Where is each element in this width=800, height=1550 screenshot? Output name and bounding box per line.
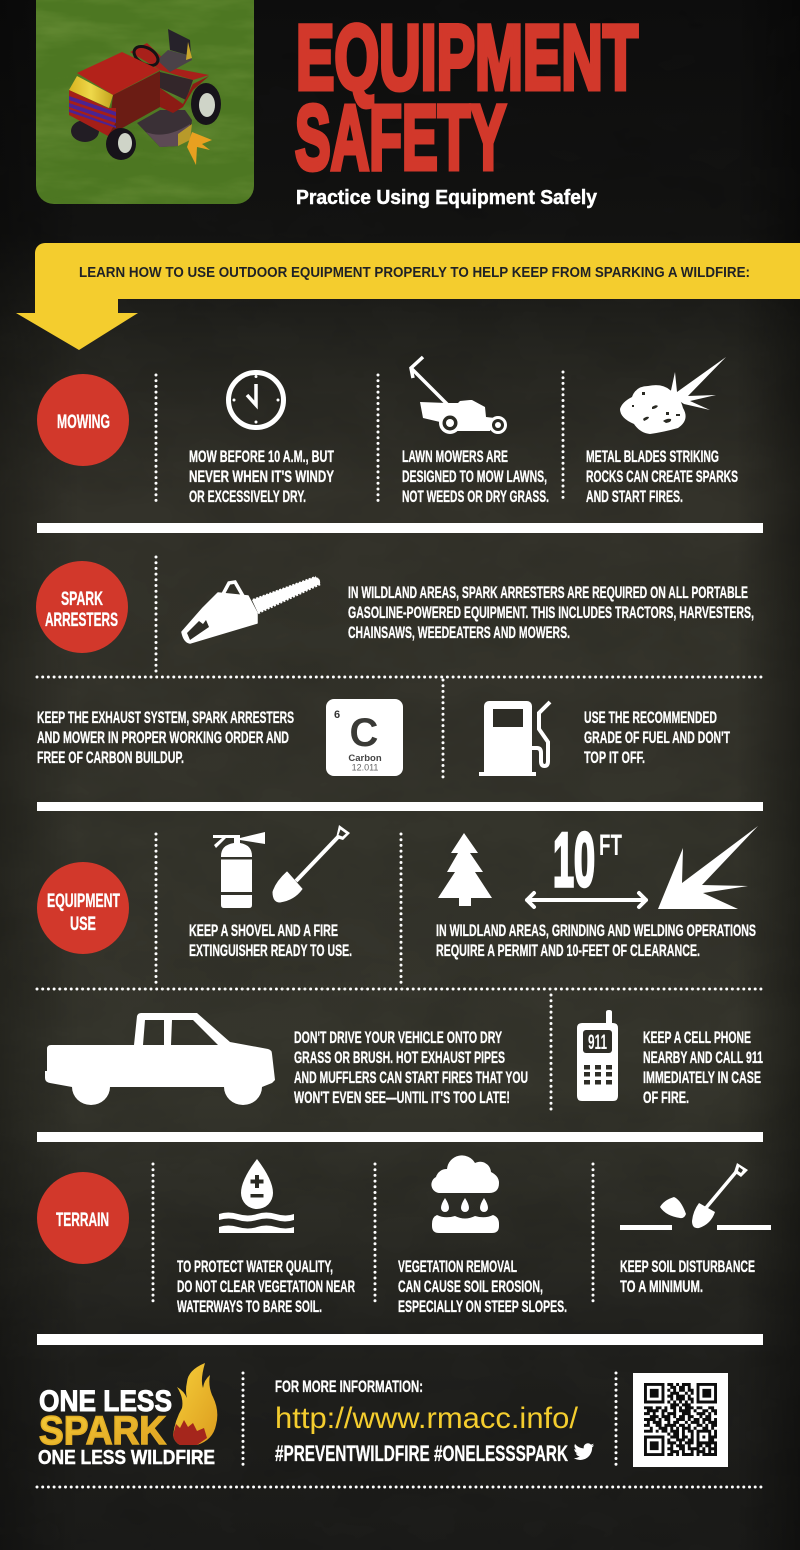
text: mow before 10: MOW BEFORE 10 A.M., BUT: [189, 448, 334, 466]
logo: one less spark: ONE LESS WILDFIRE: [38, 1447, 215, 1469]
label: 10 feet: 10: [553, 818, 595, 903]
logo: one less spark: [38, 1363, 217, 1469]
panel: lawn tile with tractor illustration: [36, 0, 254, 204]
logo: one less spark: SPARK: [39, 1409, 166, 1453]
text: metal blades: METAL BLADES STRIKING: [586, 448, 719, 466]
text: mow before 10: OR EXCESSIVELY DRY.: [189, 488, 306, 506]
text: recommended fuel: [584, 709, 730, 767]
icon: carbon periodic tile: [326, 699, 403, 776]
icon: flame: [173, 1363, 217, 1445]
panel: footer: [37, 1363, 763, 1487]
text: vegetation removal: ESPECIALLY ON STEEP SLOPES.: [398, 1298, 567, 1316]
icon: carbon periodic tile: Carbon: [348, 753, 382, 764]
text: for more information: FOR MORE INFORMATION:: [275, 1378, 423, 1396]
text: soil disturbance: [620, 1258, 755, 1296]
icon: carbon periodic tile: C: [350, 711, 378, 755]
text: recommended fuel: TOP IT OFF.: [584, 749, 645, 767]
text: lawn mowers: DESIGNED TO MOW LAWNS,: [402, 468, 547, 486]
text: vegetation removal: VEGETATION REMOVAL: [398, 1258, 517, 1276]
icon: rain cloud over soil: [431, 1155, 499, 1233]
badge: spark arresters: SPARK: [61, 588, 103, 610]
text: exhaust system: [37, 709, 294, 767]
link: rmacc url: http://www.rmacc.info/: [275, 1402, 579, 1435]
icon: tree: [438, 833, 492, 906]
icon: fuel pump: [479, 701, 550, 776]
panel: spark arresters: [36, 557, 763, 780]
text: do not drive on dry grass: WON'T EVEN SEE—UNTIL IT'S TOO LATE!: [294, 1089, 510, 1107]
banner: yellow arrow callout: [16, 243, 800, 350]
text: hashtags: #PREVENTWILDFIRE #ONELESSSPARK: [275, 1441, 568, 1466]
text: water quality: DO NOT CLEAR VEGETATION NEAR: [177, 1278, 355, 1296]
text: exhaust system: KEEP THE EXHAUST SYSTEM, SPARK ARRESTERS: [37, 709, 294, 727]
text: metal blades: [586, 448, 738, 506]
text: shovel and extinguisher: KEEP A SHOVEL AND A FIRE: [189, 922, 338, 940]
text: do not drive on dry grass: DON'T DRIVE YOUR VEHICLE ONTO DRY: [294, 1029, 502, 1047]
icon: fire extinguisher: [213, 832, 265, 908]
badge: spark arresters: ARRESTERS: [45, 609, 118, 631]
text: lawn mowers: NOT WEEDS OR DRY GRASS.: [402, 488, 549, 506]
icon: shovel: [273, 825, 350, 902]
logo: one less spark: ONE LESS: [39, 1385, 172, 1418]
qr code: [633, 1373, 728, 1467]
text: water quality: TO PROTECT WATER QUALITY,: [177, 1258, 333, 1276]
text: wildland spark arresters: CHAINSAWS, WEEDEATERS AND MOWERS.: [348, 624, 570, 642]
text: exhaust system: FREE OF CARBON BUILDUP.: [37, 749, 184, 767]
badge: terrain: TERRAIN: [56, 1209, 109, 1231]
icon: carbon periodic tile: 12.011: [352, 762, 378, 772]
text: wildland spark arresters: [348, 584, 754, 642]
icon: shovel and soil: [620, 1163, 771, 1230]
text: cell phone: OF FIRE.: [643, 1089, 689, 1107]
title: SAFETY: [295, 87, 506, 189]
text: mow before 10: NEVER WHEN IT'S WINDY: [189, 468, 334, 486]
label: 10 feet: FT: [599, 829, 622, 862]
panel: mowing: [37, 357, 738, 506]
icon: riding mower: [69, 29, 221, 165]
banner text: LEARN HOW TO USE OUTDOOR EQUIPMENT PROPERLY TO HELP KEEP FROM SPARKING A WILDFIRE:: [79, 265, 750, 281]
badge: spark arresters: [36, 561, 128, 653]
text: do not drive on dry grass: [294, 1029, 528, 1107]
text: vegetation removal: [398, 1258, 567, 1316]
text: grinding and welding: [436, 922, 756, 960]
icon: cell phone 911: [577, 1010, 618, 1101]
badge: equipment use: [37, 862, 129, 954]
icon: pickup truck: [45, 1013, 275, 1105]
text: vegetation removal: CAN CAUSE SOIL EROSION,: [398, 1278, 543, 1296]
icon: cell phone 911: 911: [588, 1031, 607, 1054]
icon: lawn mower: [411, 357, 507, 434]
text: lawn mowers: LAWN MOWERS ARE: [402, 448, 508, 466]
text: cell phone: [643, 1029, 763, 1107]
text: shovel and extinguisher: [189, 922, 352, 960]
title: [295, 7, 638, 189]
icon: water drop over waves: [219, 1159, 294, 1233]
panel: equipment use: [37, 818, 763, 1112]
text: do not drive on dry grass: AND MUFFLERS CAN START FIRES THAT YOU: [294, 1069, 528, 1087]
subtitle: Practice Using Equipment Safely: [296, 187, 598, 209]
badge: mowing: [37, 374, 129, 466]
text: recommended fuel: USE THE RECOMMENDED: [584, 709, 717, 727]
icon: carbon periodic tile: 6: [334, 709, 340, 721]
badge: terrain: [37, 1172, 129, 1264]
arrow: ten foot clearance: [527, 893, 646, 907]
text: water quality: WATERWAYS TO BARE SOIL.: [177, 1298, 322, 1316]
text: mow before 10: [189, 448, 334, 506]
icon: spark burst: [658, 826, 758, 909]
text: exhaust system: AND MOWER IN PROPER WORKING ORDER AND: [37, 729, 289, 747]
panel: terrain: [37, 1155, 771, 1316]
icon: rock and sparks: [620, 357, 726, 434]
icon: clock: [228, 372, 284, 428]
icon: chainsaw: [182, 577, 320, 643]
icon: twitter bird: [574, 1443, 594, 1460]
text: water quality: [177, 1258, 355, 1316]
badge: equipment use: USE: [70, 913, 96, 935]
badge: equipment use: EQUIPMENT: [47, 890, 120, 912]
text: shovel and extinguisher: EXTINGUISHER READY TO USE.: [189, 942, 352, 960]
text: soil disturbance: TO A MINIMUM.: [620, 1278, 703, 1296]
badge: mowing: MOWING: [57, 411, 110, 433]
text: metal blades: AND START FIRES.: [586, 488, 683, 506]
text: do not drive on dry grass: GRASS OR BRUSH. HOT EXHAUST PIPES: [294, 1049, 505, 1067]
text: lawn mowers: [402, 448, 549, 506]
